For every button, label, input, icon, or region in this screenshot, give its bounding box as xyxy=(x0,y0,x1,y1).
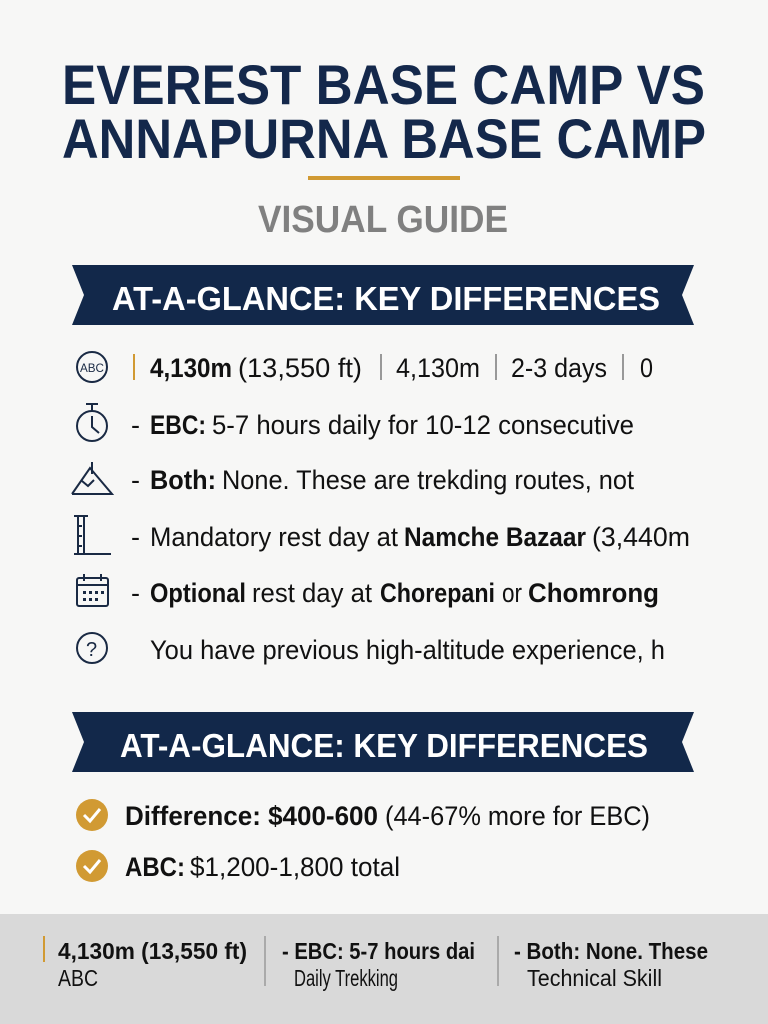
footer col 1 xyxy=(43,936,247,991)
title: EVEREST BASE CAMP VS xyxy=(62,53,705,116)
row 5: rest day: - xyxy=(131,578,140,608)
row 1: altitude: ABC xyxy=(80,361,104,375)
row 1: altitude: (13,550 ft) xyxy=(238,353,362,383)
row 4: acclimatization xyxy=(74,516,690,554)
row 2: daily trekking: - xyxy=(131,410,140,440)
row 3: technical skill: None. These are trekding routes, not xyxy=(222,465,634,495)
subtitle: VISUAL GUIDE xyxy=(258,199,508,241)
footer summary bar xyxy=(0,914,768,1024)
row 1: altitude: 4,130m xyxy=(396,353,480,383)
ribbon heading 2: AT-A-GLANCE: KEY DIFFERENCES xyxy=(120,727,648,764)
footer col 1: ABC xyxy=(58,965,98,991)
row 1: altitude: 2-3 days xyxy=(511,353,607,383)
footer col 2: Daily Trekking xyxy=(294,965,398,991)
ribbon heading 1 xyxy=(72,265,694,325)
row 4: acclimatization: - xyxy=(131,522,140,552)
title xyxy=(62,53,706,170)
row 5: rest day: or xyxy=(502,578,522,608)
row 6: who should choose: ? xyxy=(86,639,97,661)
list of key differences xyxy=(72,352,690,665)
title: ANNAPURNA BASE CAMP xyxy=(62,107,706,170)
check item 1 xyxy=(76,799,650,831)
row 3: technical skill: - xyxy=(131,465,140,495)
row 3: technical skill: Both: xyxy=(150,465,216,495)
row 2: daily trekking xyxy=(77,404,634,441)
row 5: rest day: rest day at xyxy=(252,578,372,608)
row 2: daily trekking: 5-7 hours daily for 10-12 consecutive xyxy=(212,410,634,440)
row 5: rest day: Chorepani xyxy=(380,578,495,608)
footer col 3: Technical Skill xyxy=(527,965,662,991)
check item 2 xyxy=(76,850,400,882)
ribbon heading 2 xyxy=(72,712,694,772)
row 4: acclimatization: Mandatory rest day at xyxy=(150,522,398,552)
footer col 3 xyxy=(514,938,708,991)
row 1: altitude: 0 xyxy=(640,353,653,383)
ribbon heading 1: AT-A-GLANCE: KEY DIFFERENCES xyxy=(112,280,660,317)
row 5: rest day: Optional xyxy=(150,578,246,608)
row 4: acclimatization: (3,440m xyxy=(592,522,690,552)
row 5: rest day xyxy=(77,574,659,608)
check item 1: (44-67% more for EBC) xyxy=(385,801,650,831)
footer col 1: 4,130m (13,550 ft) xyxy=(58,938,247,964)
check item 2: $1,200-1,800 total xyxy=(190,852,400,882)
row 6: who should choose: You have previous high-altitude experience, h xyxy=(150,635,665,665)
row 1: altitude xyxy=(77,352,653,383)
row 1: altitude: 4,130m xyxy=(150,353,232,383)
row 2: daily trekking: EBC: xyxy=(150,410,206,440)
footer col 2: - EBC: 5-7 hours dai xyxy=(282,938,475,964)
row 3: technical skill xyxy=(72,462,634,495)
footer col 3: - Both: None. These xyxy=(514,938,708,964)
footer col 2 xyxy=(282,938,475,991)
row 4: acclimatization: Namche Bazaar xyxy=(404,522,586,552)
check item 2: ABC: xyxy=(125,852,185,882)
check item 1: Difference: $400-600 xyxy=(125,801,378,831)
cost checklist xyxy=(76,799,650,882)
row 5: rest day: Chomrong xyxy=(528,578,659,608)
